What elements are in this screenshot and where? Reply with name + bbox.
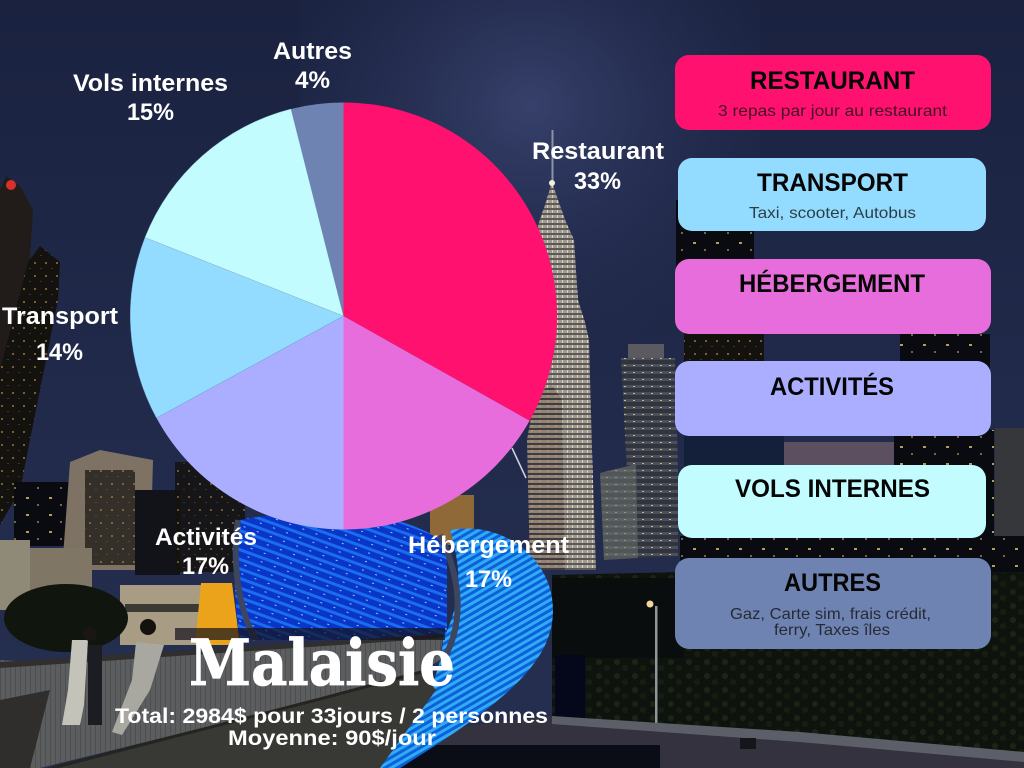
label: Vols internes 15%: 15% [127,99,174,126]
subtitle: totals: Moyenne: 90$/jour [228,727,436,750]
label: Restaurant 33% [532,138,664,195]
label: Hébergement 17% [408,532,569,593]
label: Transport 14%: 14% [36,339,83,366]
slice: Autres 4% [291,102,344,316]
people on the walkway [62,619,445,735]
label: Vols internes 15%: Vols internes [73,70,228,97]
label: Restaurant 33%: Restaurant [532,138,664,165]
panel: Activités [675,361,991,436]
panel: Hébergement [675,259,991,334]
label: Vols internes 15% [73,70,228,126]
panel: Transport [678,158,986,231]
subtitle: totals [115,705,548,750]
label: Hébergement 17%: Hébergement [408,532,569,559]
label: Restaurant 33%: 33% [574,168,621,195]
panel: Hébergement: HÉBERGEMENT [739,269,925,298]
slice: Hébergement 17% [344,316,530,530]
panel: Activités: ACTIVITÉS [770,372,894,401]
panel: Autres: ferry, Taxes îles [774,622,890,639]
road [430,716,1024,768]
walkway [0,635,443,768]
Petronas towers [538,182,596,570]
label: Hébergement 17%: 17% [465,566,512,593]
subtitle: totals: Total: 2984$ pour 33jours / 2 personnes [115,705,548,728]
panel: Restaurant: 3 repas par jour au restaurant [718,103,948,120]
label: Activités 17%: Activités [155,524,257,551]
panel: Vols internes: VOLS INTERNES [735,475,930,503]
panel: Transport: TRANSPORT [757,169,908,197]
blue tube bridge [235,512,447,640]
slice: Transport 14% [130,238,344,418]
label: Autres 4%: 4% [295,67,330,94]
label: Activités 17% [155,524,257,580]
panel: Autres: Gaz, Carte sim, frais crédit, [730,606,931,623]
panel: Autres [675,558,991,649]
label: Autres 4% [273,38,352,94]
label: Autres 4%: Autres [273,38,352,65]
slice: Restaurant 33% [344,102,557,421]
label: Transport 14%: Transport [2,303,118,330]
slice: Vols internes 15% [145,109,344,316]
panel: Vols internes [678,465,986,538]
panel: Transport: Taxi, scooter, Autobus [749,205,916,222]
panel: Restaurant [675,55,991,130]
panel: Restaurant: RESTAURANT [750,67,915,95]
pie chart [130,102,557,530]
label: Activités 17%: 17% [182,553,229,580]
panel: Autres: AUTRES [784,569,881,597]
title: Malaisie [189,626,455,701]
label: Transport 14% [2,303,118,366]
slice: Activités 17% [156,316,344,530]
foliage [552,572,1024,752]
